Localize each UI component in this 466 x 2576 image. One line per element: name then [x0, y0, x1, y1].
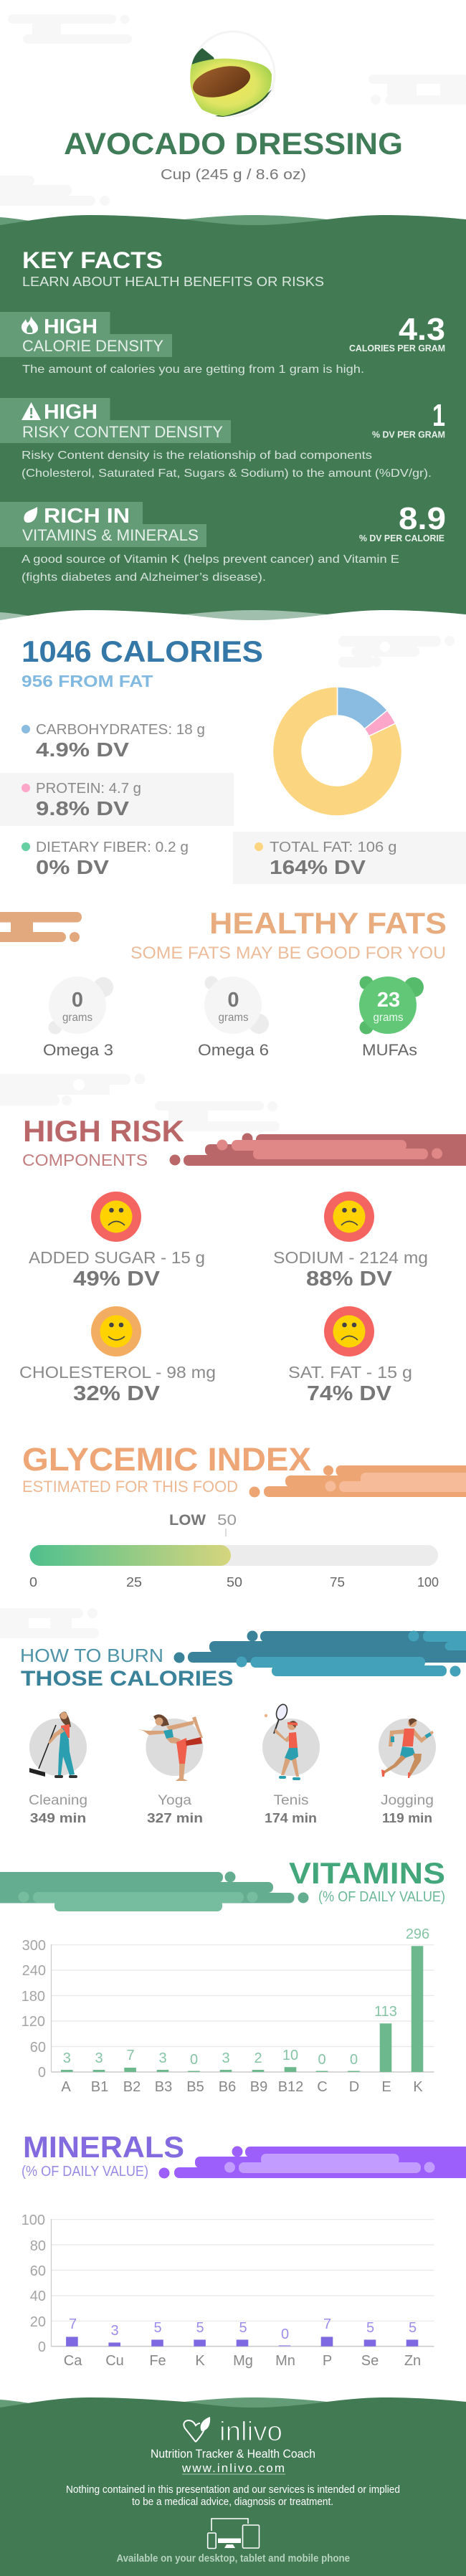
bar chart: minerals [22, 2213, 434, 2369]
activity: jogging: 119 min [382, 1811, 432, 1825]
activity: cleaning: 349 min [30, 1811, 86, 1825]
legend: carbohydrates: 4.9% DV [36, 738, 129, 761]
bar chart: minerals: 3 [110, 2323, 119, 2339]
heading: glycemic index: GLYCEMIC INDEX [22, 1441, 311, 1478]
risk item: added sugar: 49% DV [73, 1268, 161, 1291]
risk item: sodium [273, 1192, 428, 1291]
bar chart: minerals: 100 [22, 2213, 45, 2228]
logo: inlivo: inlivo [219, 2417, 282, 2447]
gauge: glycemic index: 50 [217, 1512, 237, 1529]
fact: risky content density: (Cholesterol, Saturated Fat, Sugars & Sodium) to the amount (%DV/gr). [22, 467, 432, 480]
heading: vitamins: VITAMINS [289, 1856, 445, 1890]
panel: protein background [0, 773, 234, 826]
bubble: omega 6: 0 [227, 989, 239, 1012]
legend: total fat [255, 840, 397, 878]
ribbon: minerals [159, 2147, 466, 2178]
risk item: cholesterol: CHOLESTEROL - 98 mg [19, 1363, 216, 1382]
bar chart: minerals: Mg [233, 2353, 253, 2369]
bar chart: minerals: K [195, 2353, 205, 2369]
bar chart: vitamins: B5 [186, 2079, 204, 2095]
tagline: Nutrition Tracker & Health Coach [151, 2447, 315, 2461]
bubble: omega 3: Omega 3 [43, 1041, 113, 1059]
bar chart: vitamins: 10 [282, 2048, 298, 2063]
bar chart: minerals: 5 [409, 2320, 417, 2336]
bar chart: vitamins: 3 [63, 2050, 71, 2066]
bar chart: minerals: 40 [30, 2289, 46, 2304]
fact: calorie density: CALORIE DENSITY [22, 337, 163, 355]
bar chart: vitamins: 296 [406, 1926, 429, 1942]
legend: total fat: 164% DV [270, 856, 366, 878]
bar chart: vitamins: B6 [219, 2079, 236, 2095]
bubble: MUFAs: grams [373, 1012, 403, 1024]
bubble: omega 3: grams [62, 1012, 92, 1024]
bar chart: minerals: Cu [105, 2353, 124, 2369]
bar chart: vitamins: 0 [350, 2052, 358, 2068]
bar chart: vitamins: B9 [250, 2079, 267, 2095]
legend: total fat: TOTAL FAT: 106 g [270, 840, 397, 855]
bar chart: vitamins: A [61, 2079, 71, 2095]
bubble: omega 6 [198, 976, 269, 1059]
fact: rich in vitamins and minerals: (fights diabetes and Alzheimer’s disease). [22, 571, 266, 584]
bar chart: vitamins: 180 [22, 1989, 45, 2005]
legend: carbohydrates: CARBOHYDRATES: 18 g [36, 722, 205, 738]
risk item: added sugar [29, 1192, 205, 1291]
activity: yoga: Yoga [158, 1793, 191, 1808]
ribbon: burn calories [173, 1630, 466, 1676]
bar chart: vitamins: 120 [22, 2014, 45, 2030]
bar chart: minerals: Se [361, 2353, 379, 2369]
hero image: avocado in ring [189, 32, 275, 117]
ribbon: glycemic index [249, 1465, 466, 1497]
icon: devices [208, 2519, 260, 2548]
bar chart: vitamins: B12 [278, 2079, 303, 2095]
bar chart: vitamins: B2 [123, 2079, 141, 2095]
gauge: glycemic index [29, 1512, 439, 1589]
subheading: calories from fat: 956 FROM FAT [22, 672, 153, 690]
bar chart: vitamins [22, 1926, 434, 2095]
legend: dietary fiber: 0% DV [36, 856, 109, 878]
gauge: glycemic index: 0 [29, 1575, 37, 1589]
bubble: omega 6: grams [218, 1012, 248, 1024]
legend: protein: 9.8% DV [36, 797, 129, 819]
bar chart: vitamins: B1 [91, 2079, 108, 2095]
heading: minerals: MINERALS [23, 2130, 184, 2164]
activity: yoga: 327 min [147, 1811, 203, 1825]
fact: risky content density: % DV PER GRAM [372, 429, 445, 440]
title: AVOCADO DRESSING [64, 127, 403, 161]
bar chart: minerals: Mn [275, 2353, 295, 2369]
fact: risky content density: HIGH [44, 401, 98, 424]
bar chart: minerals: 5 [366, 2320, 374, 2336]
heading: how to burn: HOW TO BURN [20, 1645, 163, 1666]
fact: rich in vitamins and minerals: % DV PER CALORIE [359, 533, 444, 543]
risk item: saturated fat [288, 1306, 412, 1405]
fact: calorie density: CALORIES PER GRAM [349, 343, 445, 353]
bar chart: vitamins: 2 [254, 2050, 262, 2066]
bubble: MUFAs: MUFAs [362, 1041, 417, 1059]
gauge: glycemic index: 50 [227, 1575, 242, 1589]
risk item: cholesterol: 32% DV [73, 1382, 161, 1405]
activity: yoga [138, 1714, 203, 1825]
gauge: glycemic index: LOW [169, 1512, 206, 1529]
subheading: minerals daily value: (% OF DAILY VALUE) [22, 2164, 148, 2180]
fact: rich in vitamins and minerals: VITAMINS & MINERALS [22, 526, 199, 544]
fact: calorie density: HIGH [44, 315, 98, 338]
bar chart: minerals: 5 [153, 2320, 162, 2336]
subheading: estimated: ESTIMATED FOR THIS FOOD [22, 1478, 238, 1496]
fact: rich in vitamins and minerals: RICH IN [44, 505, 130, 528]
fact: rich in vitamins and minerals: A good source of Vitamin K (helps prevent cancer) and Vitamin E [22, 553, 399, 566]
bubble: MUFAs [359, 976, 424, 1059]
bar chart: minerals: 7 [323, 2316, 331, 2332]
fact: calorie density [0, 312, 445, 376]
bar chart: vitamins: 0 [318, 2052, 326, 2068]
heading: calories: 1046 CALORIES [22, 635, 263, 668]
bubble: MUFAs: 23 [377, 989, 400, 1012]
bar chart: minerals: 5 [196, 2320, 204, 2336]
panel: total fat background [233, 832, 466, 884]
activity: tennis [262, 1703, 320, 1825]
bar chart: minerals: 0 [38, 2339, 46, 2355]
bar chart: minerals: 20 [30, 2314, 46, 2330]
bar chart: vitamins: 0 [190, 2052, 198, 2068]
risk item: cholesterol [19, 1306, 216, 1405]
logo: inlivo [184, 2417, 282, 2447]
bubble: omega 3 [43, 976, 113, 1059]
serving size: Cup (245 g / 8.6 oz) [161, 167, 306, 183]
heading: those calories: THOSE CALORIES [21, 1667, 234, 1691]
website link: www.inlivo.com [181, 2461, 285, 2475]
bar chart: vitamins: B3 [155, 2079, 172, 2095]
fact: calorie density: 4.3 [399, 312, 445, 347]
activity: tennis: 174 min [265, 1811, 317, 1825]
subheading: vitamins daily value: (% OF DAILY VALUE) [318, 1889, 445, 1905]
disclaimer: Nothing contained in this presentation and our services is intended or implied [66, 2484, 400, 2496]
bubble: omega 3: 0 [72, 989, 83, 1012]
bar chart: vitamins: 113 [374, 2004, 397, 2020]
risk item: saturated fat: 74% DV [307, 1382, 392, 1405]
ribbon: vitamins [0, 1871, 308, 1911]
bar chart: vitamins: 7 [126, 2048, 135, 2063]
gauge: glycemic index: 25 [126, 1575, 142, 1589]
subheading: key facts: LEARN ABOUT HEALTH BENEFITS OR RISKS [22, 275, 324, 289]
bar chart: minerals: 0 [281, 2327, 289, 2342]
risk item: sodium: SODIUM - 2124 mg [273, 1248, 428, 1267]
bar chart: minerals: Ca [64, 2353, 82, 2369]
bar chart: minerals: 7 [69, 2316, 77, 2332]
bubble: omega 6: Omega 6 [198, 1041, 269, 1059]
fact: risky content density [0, 398, 445, 480]
donut chart [272, 687, 401, 816]
bar chart: vitamins: 3 [158, 2050, 167, 2066]
fact: risky content density: 1 [432, 398, 445, 433]
icon: warning [22, 402, 41, 420]
legend: carbohydrates [22, 722, 205, 761]
subheading: components: COMPONENTS [22, 1151, 148, 1169]
activity: cleaning: Cleaning [29, 1793, 87, 1808]
gauge: glycemic index: 75 [330, 1575, 345, 1589]
bar chart: vitamins: D [349, 2079, 359, 2095]
bar chart: minerals: 5 [239, 2320, 247, 2336]
ribbon: high risk [169, 1133, 466, 1166]
activity: jogging: Jogging [381, 1793, 434, 1808]
footer [0, 2397, 466, 2576]
bar chart: vitamins: 240 [22, 1963, 46, 1979]
risk item: saturated fat: SAT. FAT - 15 g [288, 1363, 412, 1382]
risk item: sodium: 88% DV [306, 1268, 393, 1291]
bar chart: vitamins: C [317, 2079, 328, 2095]
bar chart: minerals: 80 [30, 2238, 46, 2254]
activity: cleaning [29, 1712, 87, 1825]
bar chart: minerals: Fe [149, 2353, 166, 2369]
icon: leaf [24, 507, 37, 523]
legend: dietary fiber: DIETARY FIBER: 0.2 g [36, 840, 189, 855]
bar chart: minerals: Zn [404, 2353, 421, 2369]
legend: dietary fiber [22, 840, 189, 878]
bar chart: vitamins: 3 [95, 2050, 103, 2066]
ribbon: healthy fats [0, 912, 82, 942]
legend: protein [22, 781, 141, 819]
fact: risky content density: Risky Content density is the relationship of bad components [22, 450, 372, 462]
gauge: glycemic index: 100 [417, 1575, 439, 1589]
heading: key facts: KEY FACTS [22, 247, 163, 273]
subheading: healthy fats: SOME FATS MAY BE GOOD FOR YOU [130, 944, 446, 963]
activity: tennis: Tenis [274, 1793, 308, 1808]
bar chart: vitamins: E [381, 2079, 391, 2095]
disclaimer: to be a medical advice, diagnosis or treatment. [132, 2496, 333, 2508]
bar chart: vitamins: 0 [38, 2065, 46, 2081]
disclaimer [66, 2484, 400, 2508]
availability note: Available on your desktop, tablet and mobile phone [116, 2553, 350, 2565]
fact: rich in vitamins and minerals: 8.9 [399, 501, 446, 536]
legend: protein: PROTEIN: 4.7 g [36, 781, 141, 797]
risk item: added sugar: ADDED SUGAR - 15 g [29, 1248, 205, 1267]
fact: calorie density: The amount of calories you are getting from 1 gram is high. [22, 363, 364, 376]
heading: healthy fats: HEALTHY FATS [209, 906, 447, 940]
bar chart: vitamins: 3 [222, 2050, 230, 2066]
icon: flame [22, 316, 38, 334]
panel: key facts [0, 215, 466, 625]
bar chart: minerals: P [323, 2353, 332, 2369]
fact: risky content density: RISKY CONTENT DENSITY [22, 423, 223, 441]
activity: jogging [379, 1719, 436, 1825]
heading: high risk: HIGH RISK [23, 1114, 184, 1148]
bar chart: vitamins: 60 [30, 2040, 46, 2055]
bar chart: vitamins: 300 [22, 1938, 46, 1954]
fact: rich in vitamins and minerals [0, 501, 446, 584]
bar chart: vitamins: K [413, 2079, 423, 2095]
bar chart: minerals: 60 [30, 2263, 46, 2279]
